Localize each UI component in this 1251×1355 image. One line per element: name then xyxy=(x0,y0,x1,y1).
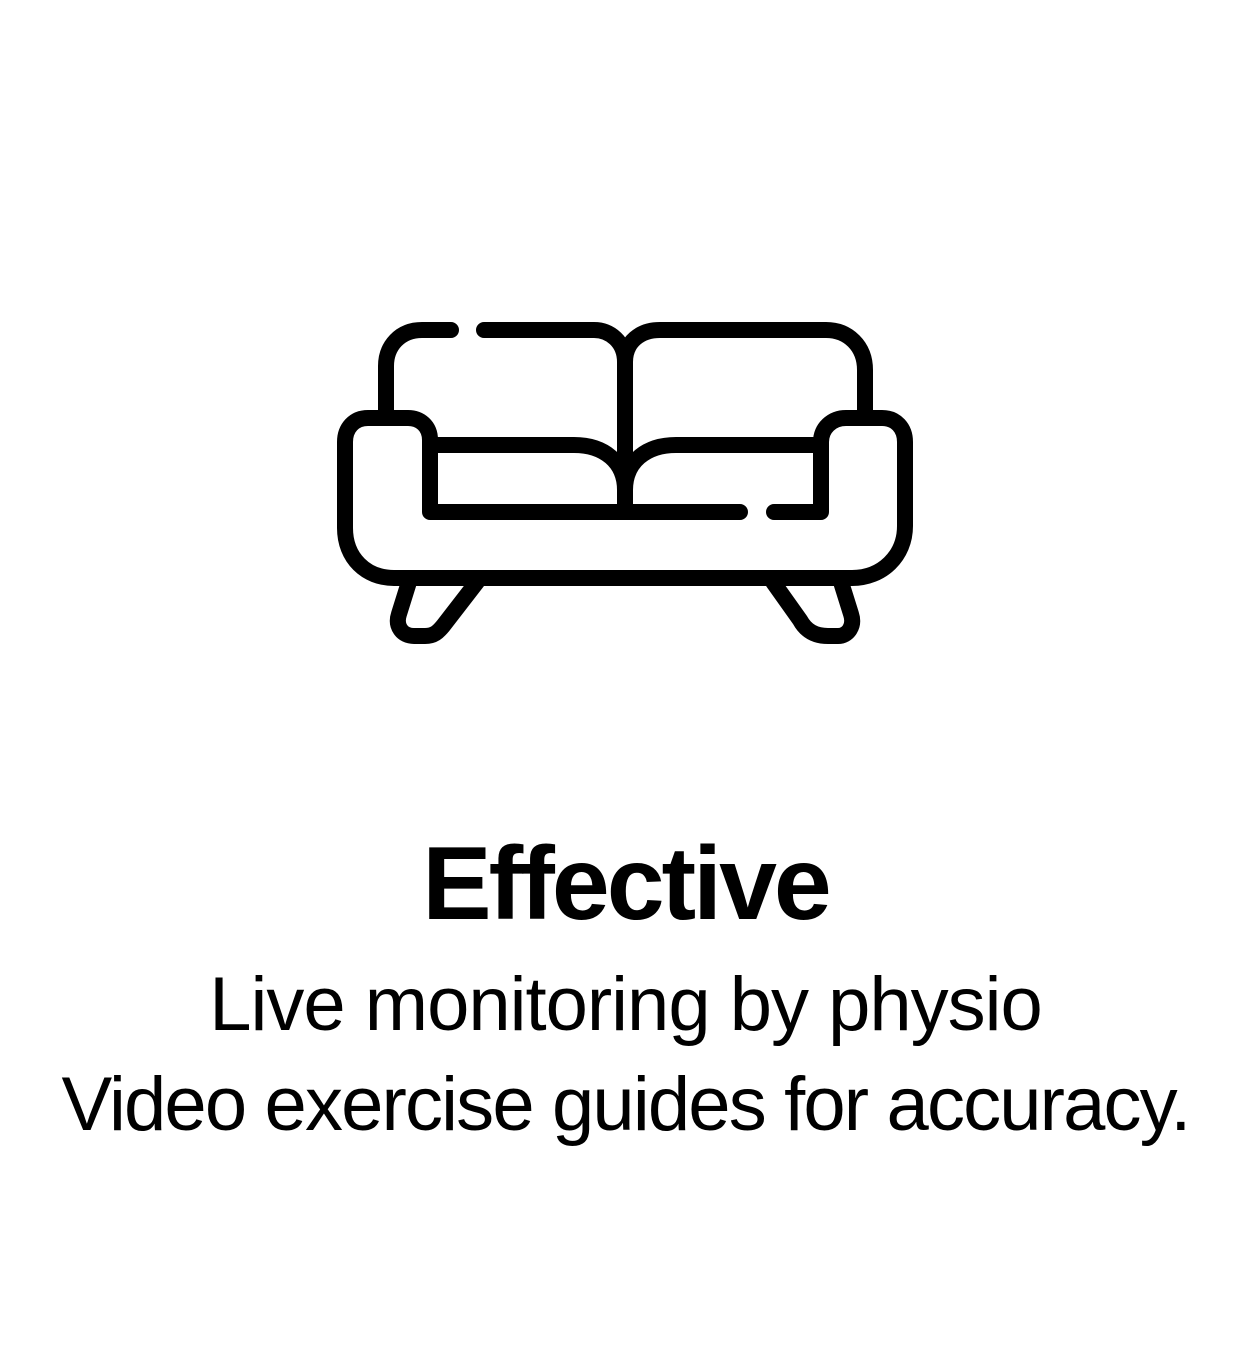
body text: Video exercise guides for accuracy. xyxy=(62,1062,1189,1147)
title: Effective xyxy=(422,826,829,942)
icon: sofa xyxy=(337,322,913,644)
body text: Live monitoring by physio xyxy=(209,962,1042,1047)
body text xyxy=(62,962,1189,1147)
